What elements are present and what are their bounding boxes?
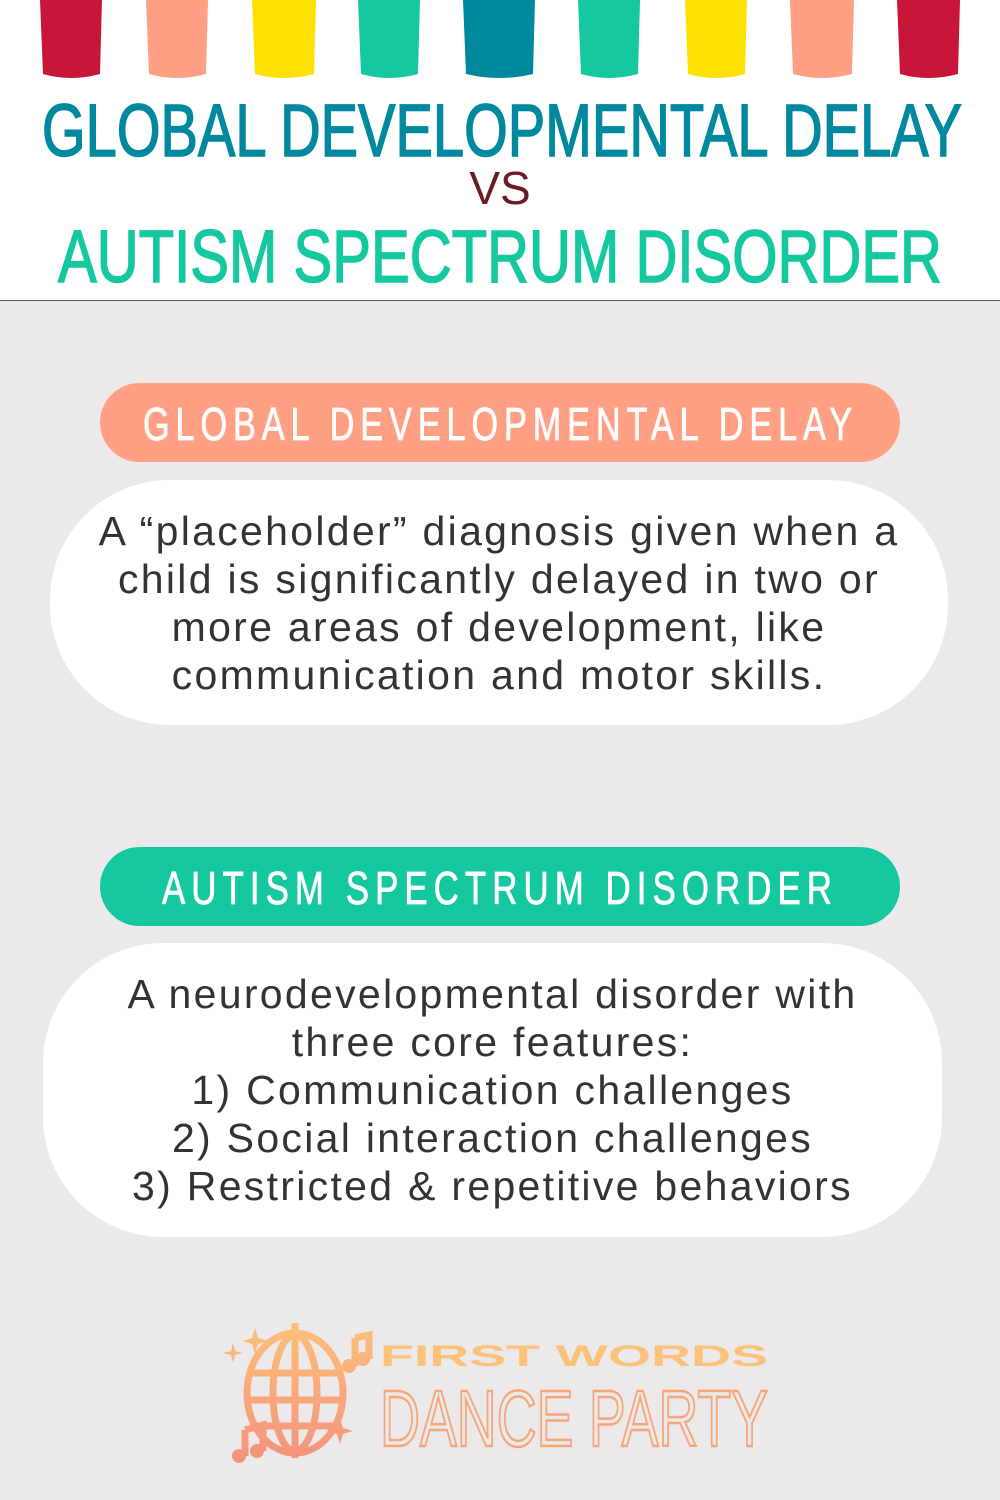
pill: autism spectrum disorder [100,847,900,926]
color bars [40,0,960,78]
title: VS [469,162,531,214]
pill: global developmental delay [100,383,900,462]
box: GDD definition: more areas of development, like [172,604,826,650]
box: ASD definition: 3) Restricted & repetitive behaviors [132,1163,853,1209]
box: ASD definition: 1) Communication challenges [191,1067,794,1113]
box: ASD definition [43,943,942,1237]
box: GDD definition [50,480,948,725]
title [42,89,962,298]
box: ASD definition: 2) Social interaction challenges [172,1115,813,1161]
logo: FIRST WORDS [380,1340,768,1373]
box: ASD definition: three core features: [292,1019,693,1065]
box: GDD definition: communication and motor skills. [172,652,826,698]
header [0,0,1000,301]
box: ASD definition: A neurodevelopmental disorder with [127,971,858,1017]
box: GDD definition: A “placeholder” diagnosis given when a [99,508,899,554]
icon: disco globe [245,1323,369,1458]
logo [223,1323,768,1463]
box: GDD definition: child is significantly delayed in two or [118,556,880,602]
